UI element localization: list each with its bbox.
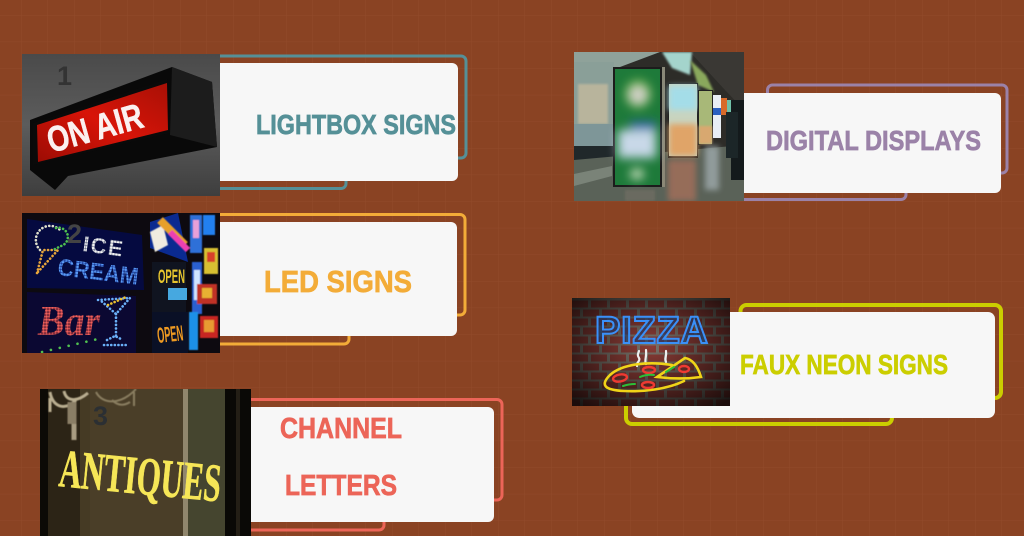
label: digital displays: DIGITAL DISPLAYS: [766, 125, 981, 156]
photo: pizza neon on brick wall: [564, 298, 730, 406]
outline frame: yellow-green: [626, 305, 1001, 424]
photo: on air lightbox: ON AIR: [42, 95, 148, 161]
outline frame: mauve: [744, 85, 1007, 200]
photo: on air lightbox: [22, 54, 220, 196]
panel: faux neon signs: [564, 298, 1001, 424]
photo: antiques shop window: [40, 389, 251, 536]
neon word: PIZZA: [595, 310, 708, 352]
photo: ice cream and bar LED signs: Bar: [37, 299, 101, 345]
label: faux neon signs: FAUX NEON SIGNS: [740, 349, 948, 380]
photo: ice cream and bar LED signs: OPEN: [158, 267, 185, 288]
card: [738, 93, 1001, 193]
photo: digital display totems: [574, 52, 744, 201]
label: channel: CHANNEL: [280, 413, 402, 445]
sign lettering: ANTIQUES: [57, 438, 224, 513]
label: lightbox signs: LIGHTBOX SIGNS: [256, 109, 456, 140]
outline frame: coral: [251, 400, 502, 530]
photo: antiques shop window: 3: [93, 401, 108, 431]
panel: lightbox signs: [22, 54, 466, 196]
right side sign cluster: [150, 215, 218, 350]
card: [214, 63, 458, 181]
outline frame: teal: [220, 56, 466, 188]
photo: ice cream and bar LED signs: OPEN: [156, 320, 184, 348]
panel: LED signs: [22, 213, 465, 353]
ice cream cone dots: [36, 226, 130, 352]
outline frame: amber: [75, 214, 465, 344]
photo: on air lightbox: 1: [57, 61, 72, 91]
panel: channel letters: [40, 389, 502, 536]
label: LED signs: LED SIGNS: [264, 264, 412, 299]
label: letters: LETTERS: [285, 470, 397, 502]
photo: ice cream and bar LED signs: CREAM: [56, 254, 140, 291]
photo: ice cream and bar LED signs: ICE: [81, 231, 124, 262]
photo: ice cream and bar LED signs: [22, 213, 220, 353]
panel: digital displays: [574, 52, 1007, 201]
neon pizza: [605, 350, 701, 391]
card: [214, 222, 457, 336]
card: [632, 312, 995, 418]
chandelier: [50, 389, 136, 440]
card: [245, 407, 494, 522]
photo: ice cream and bar LED signs: 2: [67, 219, 82, 249]
